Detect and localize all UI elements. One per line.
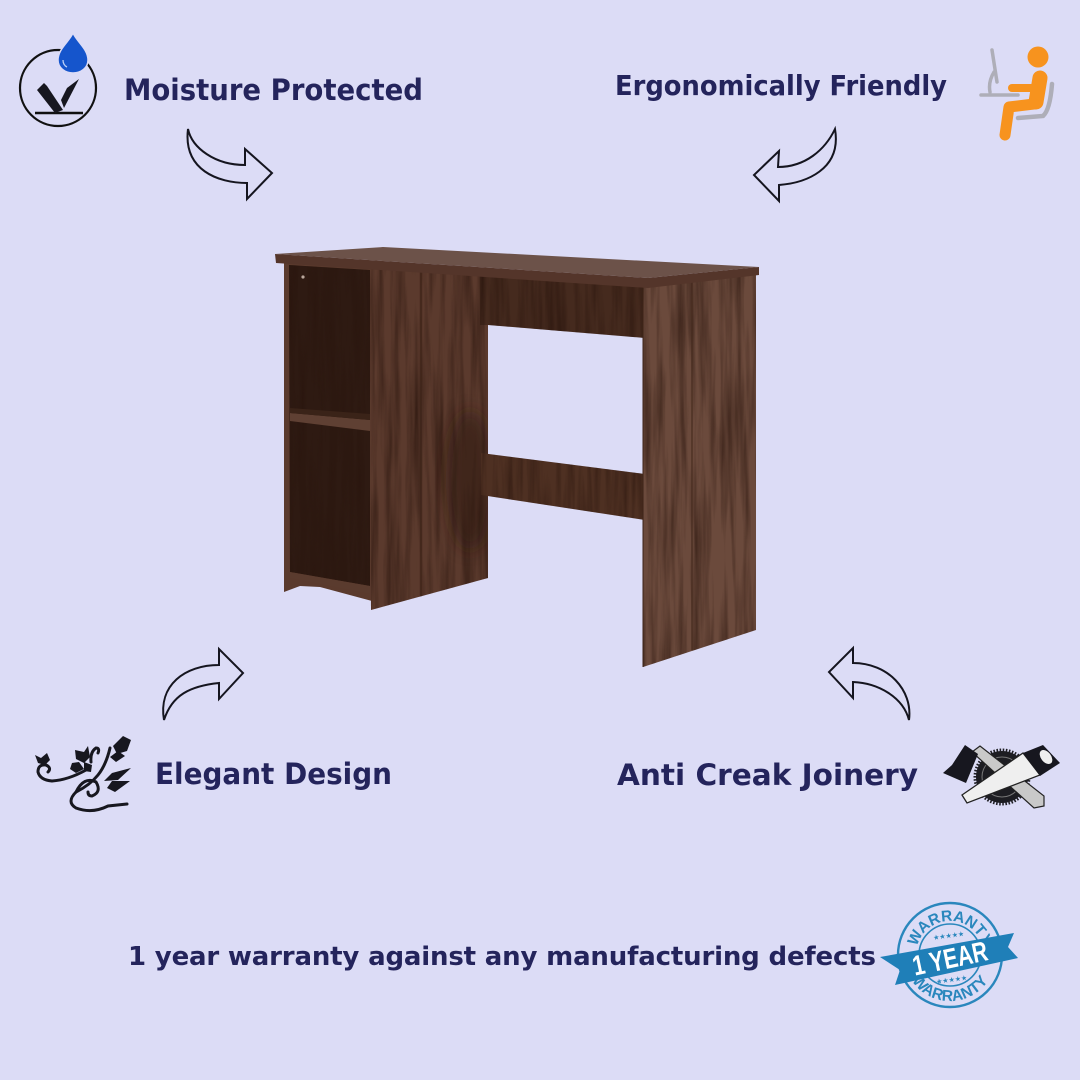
label: moisture protected: Moisture Protected	[124, 73, 423, 107]
badge: 1 year warranty: WARRANTY	[906, 910, 990, 944]
right panel	[643, 272, 756, 667]
shelf pin	[301, 275, 305, 279]
back of shelf column	[284, 262, 372, 601]
badge: 1 year warranty: ★★★★★	[933, 930, 965, 942]
icon: seated person at computer	[981, 46, 1052, 135]
shelf	[290, 413, 370, 431]
warranty line: 1 year warranty against any manufacturing defects	[128, 942, 876, 972]
product: wooden desk	[275, 247, 759, 667]
interior of shelf column	[289, 265, 370, 586]
middle panel	[370, 268, 488, 610]
upper rail	[480, 276, 645, 338]
icon: floral ornament	[35, 736, 131, 811]
icon: axe, saw and blade	[943, 745, 1060, 808]
icon: moisture check and water drop	[20, 33, 96, 126]
arrow: bottom right	[829, 648, 909, 720]
label: ergonomically friendly: Ergonomically Friendly	[615, 69, 947, 102]
feature: ergonomically friendly	[615, 46, 1052, 201]
desk top surface	[275, 247, 759, 278]
arrow: top right	[754, 129, 836, 201]
bottom shelf	[290, 572, 370, 594]
badge: 1 year warranty: ★★★★★	[936, 974, 968, 986]
feature: elegant design	[35, 649, 392, 811]
lower rail	[481, 453, 645, 520]
label: anti creak joinery: Anti Creak Joinery	[617, 758, 918, 792]
label: elegant design: Elegant Design	[155, 757, 392, 791]
feature: moisture protected	[20, 33, 423, 199]
badge: 1 year warranty: WARRANTY	[913, 974, 986, 1002]
arrow: bottom left	[163, 649, 243, 720]
badge: 1 year warranty	[880, 902, 1018, 1008]
feature: anti creak joinery	[617, 648, 1060, 808]
panel shading	[421, 270, 494, 600]
arrow: top left	[188, 129, 272, 199]
desk top edge	[275, 254, 759, 288]
badge: 1 year warranty: 1 YEAR	[910, 935, 990, 982]
